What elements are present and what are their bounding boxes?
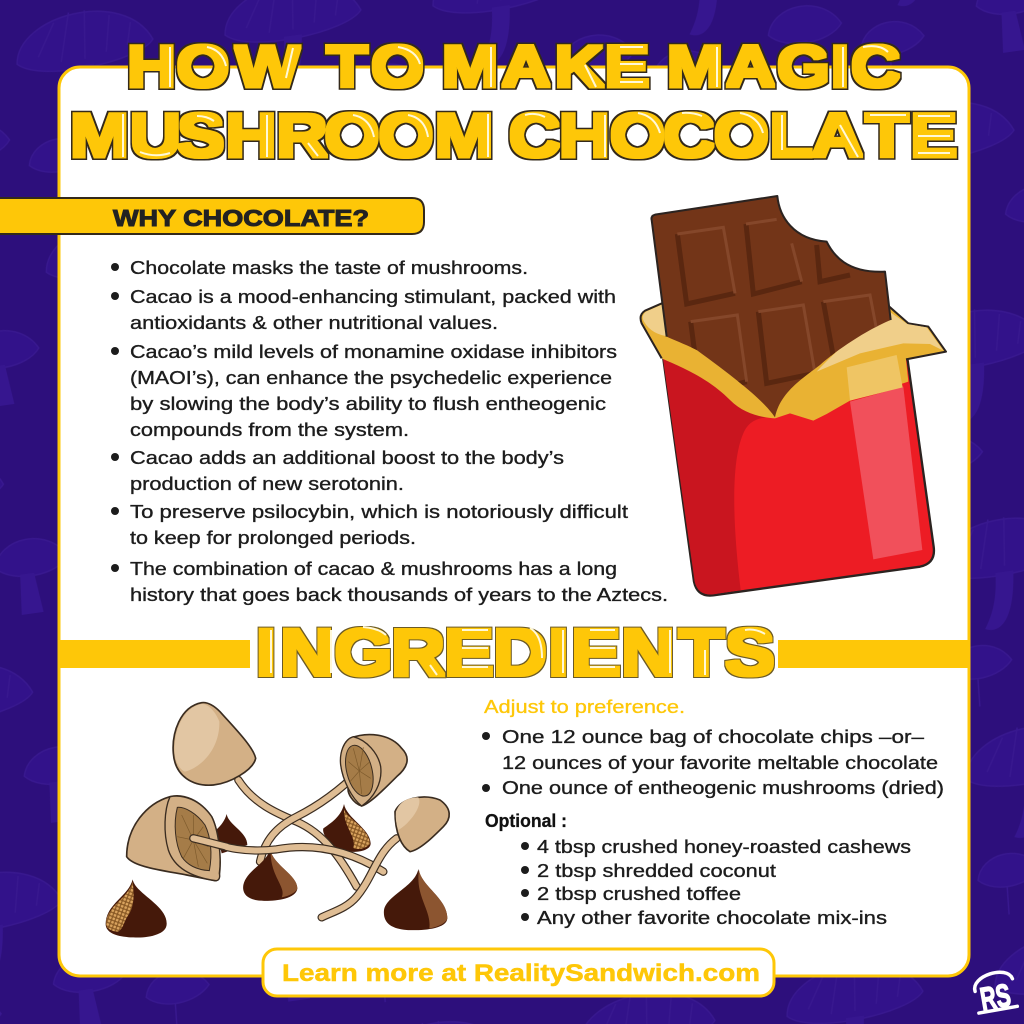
chocolate chip: behind left — [216, 814, 247, 853]
title: HOW TO MAKE MAGIC — [127, 34, 900, 99]
chocolate chip: bottom left — [106, 879, 167, 937]
title: MUSHROOM CHOCOLATE — [70, 102, 958, 170]
mushroom: top right — [340, 735, 407, 806]
section header: why chocolate — [0, 198, 424, 234]
mushroom: left with stem — [127, 796, 383, 881]
chocolate chip: centre — [243, 849, 297, 901]
optional heading: Optional : — [485, 810, 567, 831]
illustration: chocolate bar in red wrapper — [641, 196, 946, 596]
ingredients list: One 12 ounce bag of chocolate chips –or– — [502, 726, 925, 747]
bullet list: why chocolate: by slowing the body’s ability to flush entheogenic — [130, 393, 606, 414]
illustration: mushrooms and chocolate chips — [106, 703, 449, 937]
bullet list: why chocolate: production of new serotonin. — [130, 473, 404, 494]
section heading: ingredients: INGREDIENTS — [256, 615, 775, 689]
bullet list: why chocolate: Chocolate masks the taste of mushrooms. — [130, 257, 528, 278]
chocolate squares — [677, 219, 877, 393]
bullet list: why chocolate: to keep for prolonged periods. — [130, 527, 416, 548]
bullet list: why chocolate: antioxidants & other nutritional values. — [130, 312, 498, 333]
bullet list: why chocolate — [111, 257, 668, 605]
bullet list: why chocolate: Cacao adds an additional boost to the body’s — [130, 447, 564, 468]
bullet list: why chocolate: Cacao’s mild levels of monamine oxidase inhibitors — [130, 341, 617, 362]
chocolate chip: bottom right — [384, 869, 447, 930]
bullet list: why chocolate: (MAOI’s), can enhance the psychedelic experience — [130, 367, 612, 388]
optional ingredients list: Any other favorite chocolate mix-ins — [537, 907, 887, 928]
optional ingredients list: 2 tbsp shredded coconut — [537, 860, 776, 881]
optional ingredients list: 2 tbsp crushed toffee — [537, 883, 741, 904]
bullet list: why chocolate: The combination of cacao & mushrooms has a long — [130, 558, 617, 579]
call to action button — [263, 949, 774, 996]
section heading: ingredients — [58, 615, 970, 689]
mushroom: top left — [173, 703, 256, 785]
bullet list: why chocolate: To preserve psilocybin, which is notoriously difficult — [130, 501, 628, 522]
mushroom: right — [322, 797, 449, 917]
chocolate chip: speckled back — [323, 804, 371, 852]
title — [70, 34, 958, 170]
bullet list: why chocolate: history that goes back thousands of years to the Aztecs. — [130, 584, 668, 605]
call to action button: Learn more at RealitySandwich.com — [282, 960, 760, 987]
bullet list: why chocolate: Cacao is a mood-enhancing stimulant, packed with — [130, 286, 616, 307]
ingredients list — [482, 726, 944, 798]
ingredients note: Adjust to preference. — [484, 696, 685, 717]
mushroom stems — [238, 771, 359, 887]
section header: why chocolate: WHY CHOCOLATE? — [113, 205, 369, 231]
optional ingredients list — [521, 836, 911, 928]
bullet list: why chocolate: compounds from the system. — [130, 419, 409, 440]
ingredients list: 12 ounces of your favorite meltable chocolate — [502, 752, 938, 773]
ingredients list: One ounce of entheogenic mushrooms (dried) — [502, 777, 944, 798]
white content panel — [59, 67, 969, 976]
optional ingredients list: 4 tbsp crushed honey-roasted cashews — [537, 836, 911, 857]
